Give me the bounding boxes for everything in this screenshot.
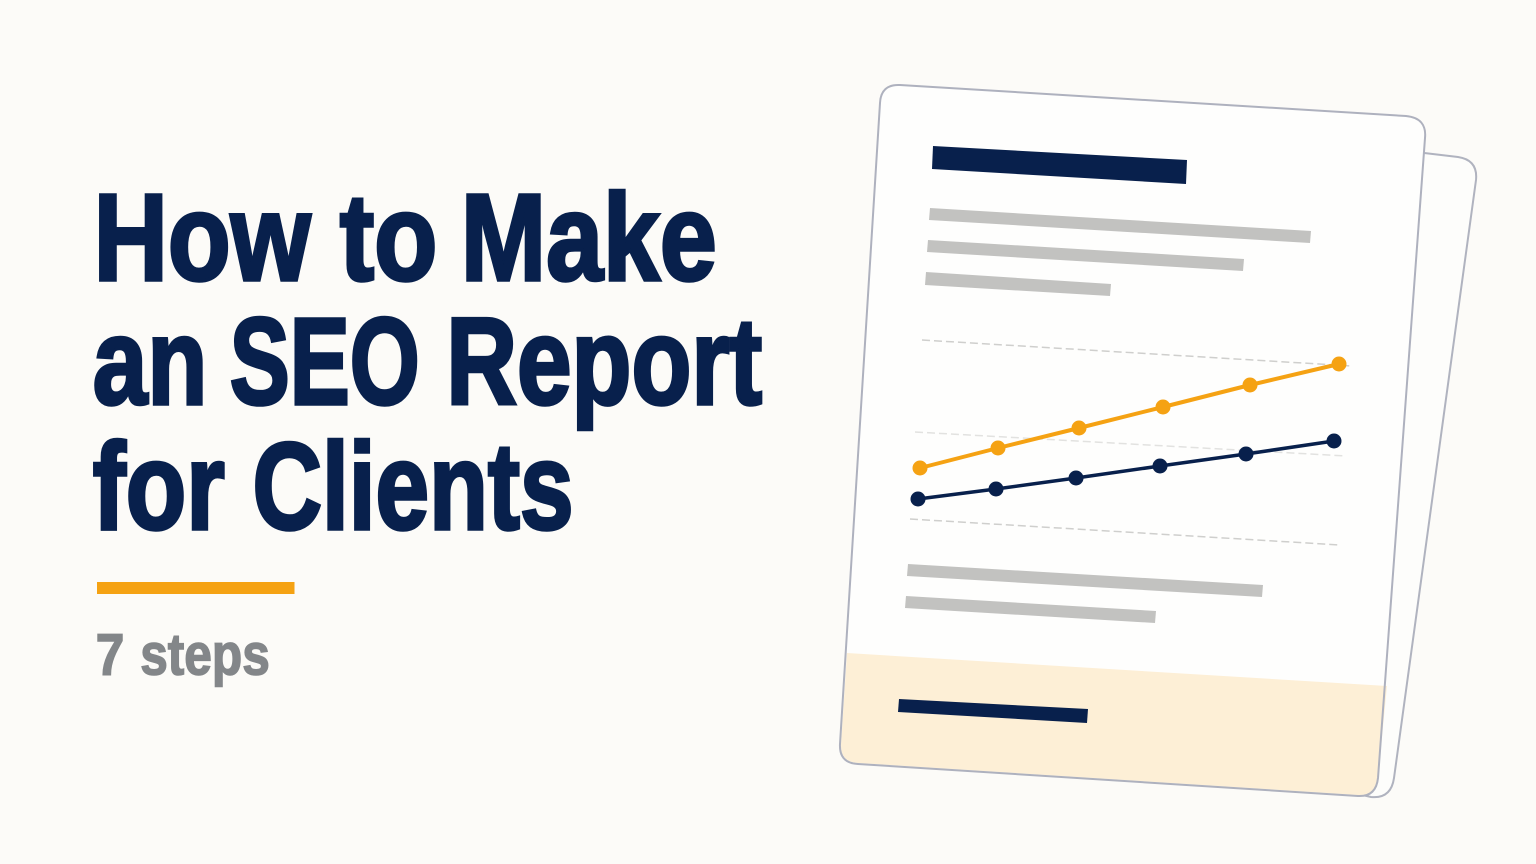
- footer bar: [898, 699, 1088, 723]
- intro text lines: [925, 208, 1311, 296]
- subtitle: [96, 622, 270, 688]
- subtitle: steps: [140, 622, 270, 688]
- front page: [840, 85, 1425, 796]
- line chart: [910, 340, 1352, 545]
- title: [93, 170, 762, 556]
- accent bar: [97, 582, 294, 594]
- navy series: [910, 434, 1342, 506]
- footer band: [841, 653, 1387, 795]
- title: Report: [446, 294, 762, 431]
- title: Clients: [252, 419, 574, 556]
- title: to: [340, 170, 437, 307]
- gridlines: [910, 340, 1352, 545]
- title: How: [94, 170, 311, 307]
- title: Make: [461, 170, 717, 307]
- orange series: [912, 356, 1346, 476]
- back page: [1340, 152, 1476, 797]
- title: for: [93, 419, 225, 556]
- report heading bar: [932, 146, 1187, 184]
- subtitle: 7: [96, 622, 124, 688]
- title: SEO: [230, 294, 420, 431]
- front page outline: [840, 85, 1425, 796]
- illustration: report pages: [840, 85, 1476, 797]
- title: an: [93, 294, 207, 431]
- lower text lines: [905, 564, 1263, 623]
